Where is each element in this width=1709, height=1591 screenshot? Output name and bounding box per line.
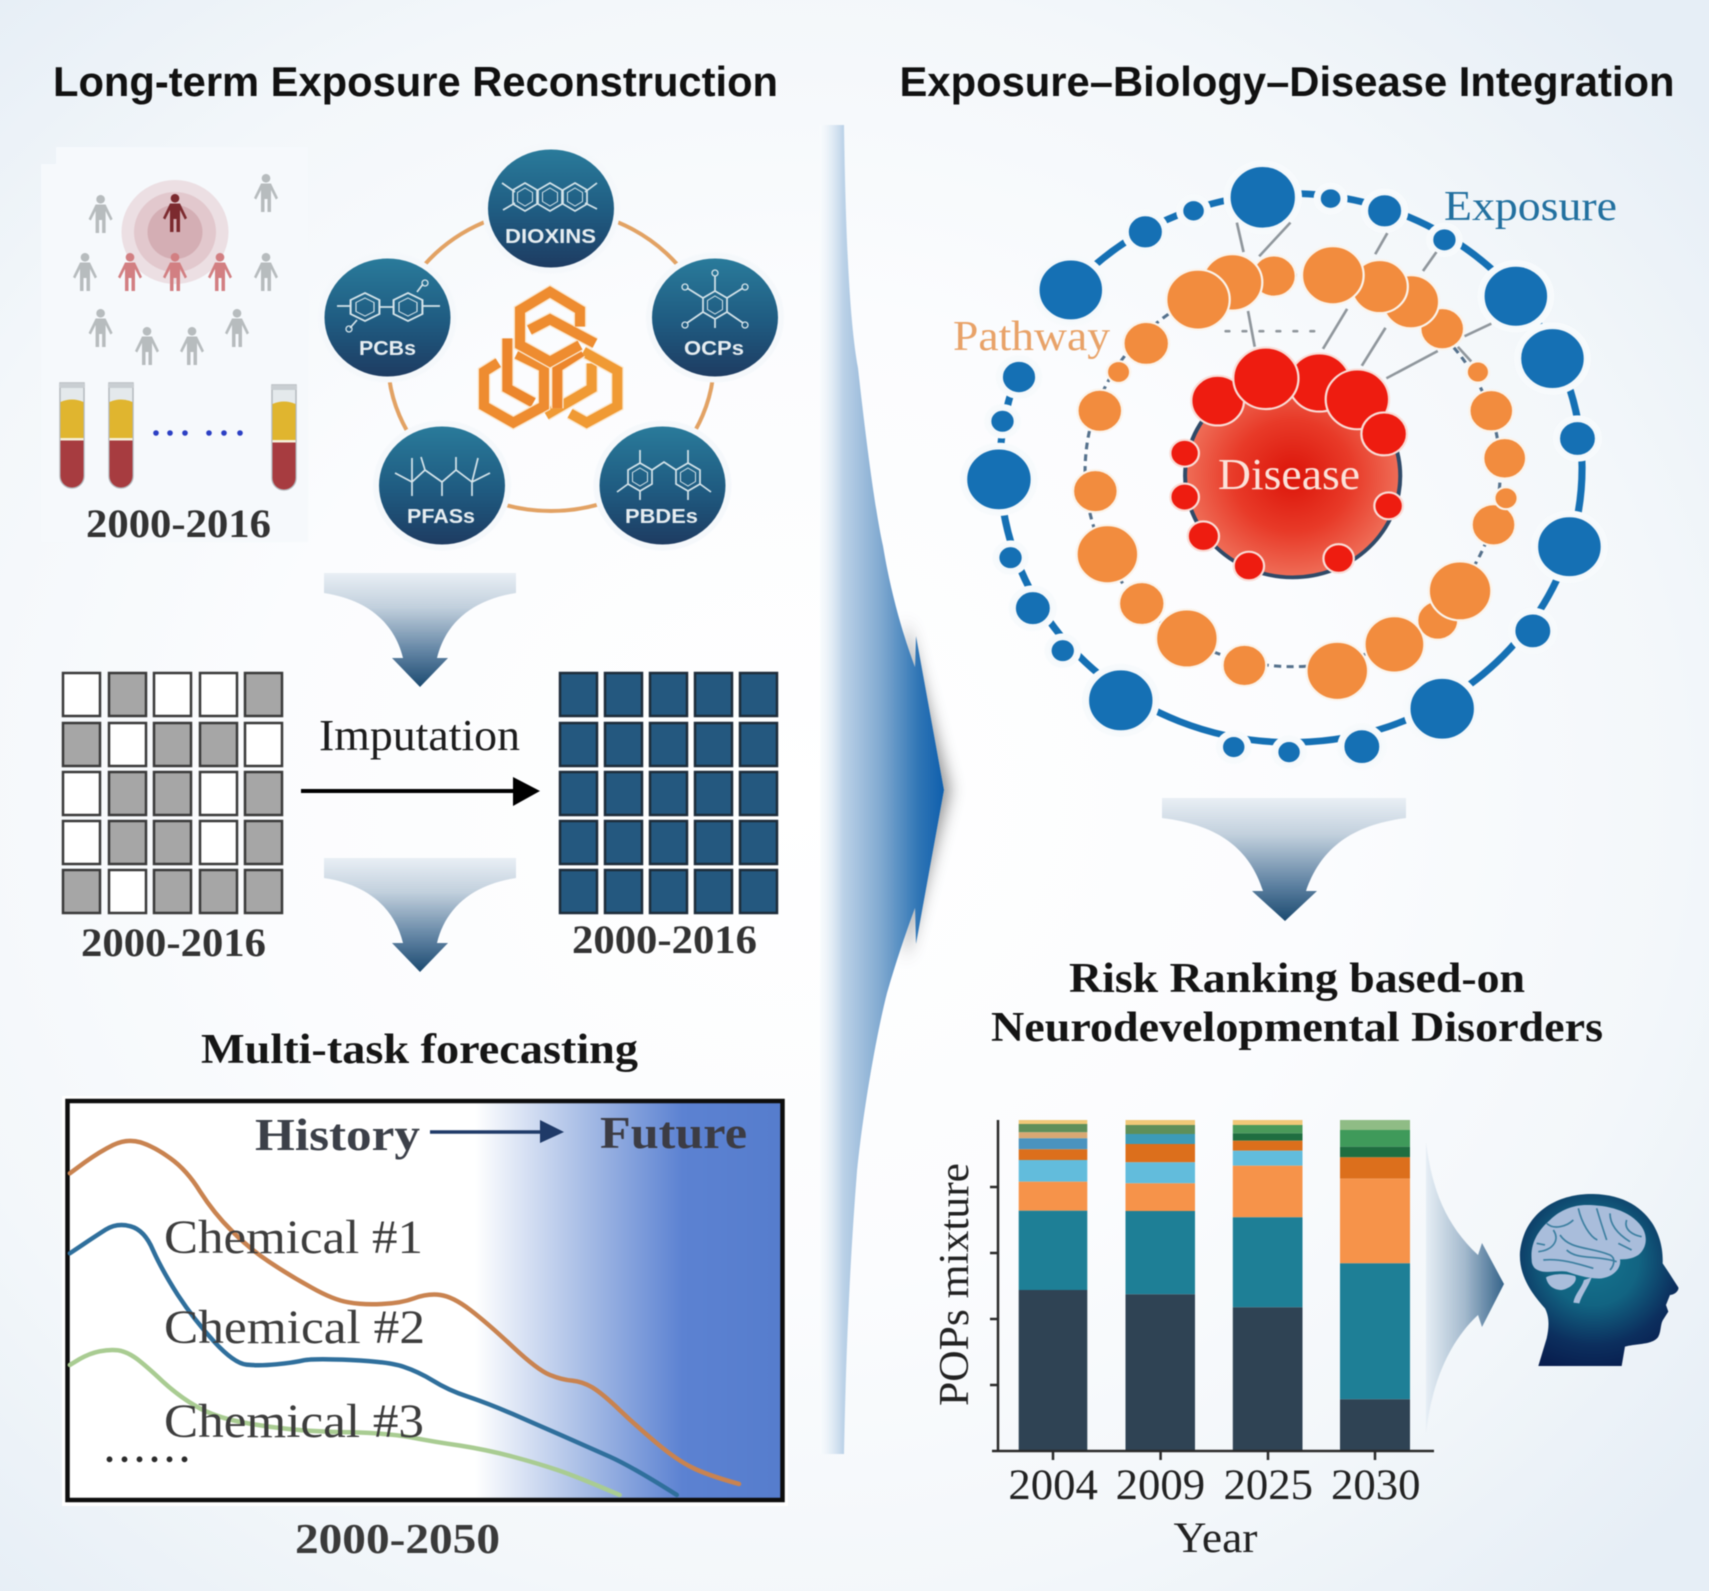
node: PFASs: PFASs	[407, 506, 475, 528]
node: PFASs	[376, 424, 508, 548]
node: PBDEs	[596, 424, 728, 548]
disease core	[1185, 375, 1400, 577]
label: pathway: Pathway	[953, 314, 1110, 360]
sampling years label: 2000-2016	[86, 501, 271, 546]
arrow: history to future	[430, 1120, 564, 1143]
pathway nodes	[1073, 246, 1526, 700]
connecting ring	[388, 209, 714, 511]
node: PCBs	[322, 256, 454, 380]
label: incomplete matrix years: 2000-2016	[81, 920, 266, 965]
arrow: funnel down to matrices	[324, 573, 516, 687]
arrow: funnel down to forecasting	[324, 858, 516, 972]
heading: risk ranking	[991, 956, 1603, 1051]
title: right section heading: Exposure–Biology–Disease Integration	[900, 58, 1674, 105]
node halos breaking the ring	[966, 166, 1602, 764]
ellipsis dots between tubes	[153, 430, 243, 436]
chart: forecasting lines history to future	[62, 1096, 788, 1506]
arrow: funnel down to risk ranking	[1162, 798, 1406, 921]
bar 2004	[1019, 1120, 1087, 1451]
node: OCPs	[649, 256, 781, 380]
node: PBDEs: PBDEs	[625, 506, 698, 528]
icon: blood sample tubes	[59, 383, 297, 490]
exposure nodes	[966, 166, 1602, 764]
node: DIOXINS	[485, 146, 617, 270]
node: OCPs: OCPs	[684, 338, 744, 360]
chart: exposure pathway disease network	[953, 166, 1617, 764]
label: forecast years: 2000-2050	[295, 1517, 500, 1563]
panel: incomplete exposure matrix	[63, 673, 282, 913]
label: disease: Disease	[1218, 450, 1360, 499]
label: exposure: Exposure	[1444, 184, 1617, 230]
line: chemical 3	[70, 1350, 620, 1495]
icon: population figures	[73, 174, 278, 365]
label: chemical 1: Chemical #1	[164, 1211, 423, 1264]
x-axis year labels: 2030	[1331, 1462, 1420, 1509]
label: imputation: Imputation	[319, 711, 520, 760]
panel: POP chemical classes	[322, 146, 781, 548]
label: chemical 3: Chemical #3	[164, 1395, 424, 1448]
pathway ring	[1085, 275, 1500, 667]
arrow: central flow arrow	[820, 125, 950, 1454]
node: PCBs: PCBs	[359, 338, 416, 360]
arrow: imputation	[301, 777, 540, 806]
line: chemical 1	[70, 1141, 739, 1484]
label: history: History	[255, 1109, 420, 1160]
exposure ring	[1000, 194, 1582, 742]
heading: multi-task forecasting: Multi-task forecasting	[201, 1027, 638, 1073]
y-axis title: POPs mixture	[932, 1163, 978, 1406]
chart: POPs mixture stacked bars	[932, 1120, 1434, 1562]
icon: central interlocked hexagons	[484, 292, 617, 423]
title: left section heading: Long-term Exposure Reconstruction	[53, 58, 778, 105]
disease nodes	[1170, 348, 1407, 580]
x-axis year labels	[1008, 1462, 1420, 1509]
x-axis year labels: 2009	[1116, 1462, 1205, 1509]
x-axis year labels: 2025	[1224, 1462, 1313, 1509]
node: DIOXINS: DIOXINS	[505, 226, 596, 248]
bar 2009	[1126, 1120, 1195, 1451]
label: chemical 2: Chemical #2	[164, 1301, 425, 1354]
arrow: bars to brain	[1426, 1142, 1504, 1433]
connector lines	[1226, 223, 1491, 378]
label: more chemicals dots: ......	[105, 1430, 189, 1470]
axes and ticks	[990, 1120, 1434, 1460]
heading: risk ranking: Neurodevelopmental Disorders	[991, 1005, 1603, 1051]
bar 2030	[1340, 1120, 1410, 1451]
label: imputed matrix years: 2000-2016	[572, 917, 757, 962]
panel: imputed exposure matrix	[560, 673, 777, 913]
panel: population and blood sampling	[41, 147, 308, 546]
label: future: Future	[600, 1107, 747, 1158]
x-axis year labels: 2004	[1008, 1462, 1098, 1509]
line: chemical 2	[70, 1225, 677, 1495]
heading: risk ranking: Risk Ranking based-on	[1069, 956, 1525, 1002]
x-axis title: Year	[1174, 1515, 1258, 1562]
exposure halo rings	[122, 180, 228, 284]
bar 2025	[1233, 1120, 1302, 1451]
icon: head with brain	[1520, 1194, 1678, 1366]
